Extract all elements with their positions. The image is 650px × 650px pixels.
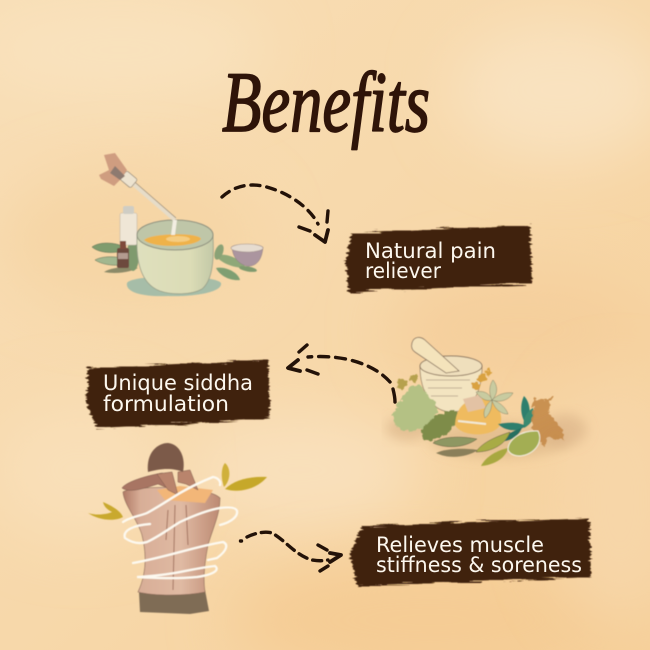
small dark bottle <box>117 241 129 268</box>
saucer <box>127 276 221 296</box>
yellow sprigs <box>397 374 418 389</box>
white ribbons <box>123 477 237 578</box>
label: natural pain reliever <box>346 225 532 292</box>
right leaves <box>222 463 267 491</box>
drop <box>171 220 177 235</box>
dropper cap <box>120 171 138 188</box>
cup rim and interior <box>137 220 213 250</box>
label: natural pain reliever: reliever <box>365 259 441 283</box>
teal leaf cluster <box>497 396 534 442</box>
pestle <box>412 337 459 373</box>
label: unique siddha formulation: Unique siddha <box>103 371 253 395</box>
spine <box>166 505 188 590</box>
right leaves <box>213 243 257 280</box>
hand <box>99 153 127 186</box>
orange sprigs top <box>472 369 491 390</box>
ground shadow <box>386 414 587 458</box>
dark green herb <box>421 411 458 441</box>
pale star herb <box>476 380 513 418</box>
yellow oil jar <box>455 398 501 434</box>
trousers <box>139 590 209 614</box>
title: Benefits <box>222 54 430 150</box>
mortar <box>420 366 482 412</box>
warm neck highlight <box>157 486 213 503</box>
label: unique siddha formulation: formulation <box>103 392 229 416</box>
label: relieves muscle stiffness and soreness <box>350 518 591 586</box>
left leaves <box>92 239 139 273</box>
cup body <box>137 236 213 294</box>
left leaf <box>88 502 123 520</box>
arrow: back to relieves muscle stiffness and soreness <box>240 532 341 571</box>
bare back <box>123 487 220 595</box>
arm across shoulders <box>122 473 172 490</box>
small bowl <box>231 244 263 266</box>
label: relieves muscle stiffness and soreness: stiffness & soreness <box>376 553 582 577</box>
illustration: herbal oil cup with dropper <box>92 153 263 296</box>
label: unique siddha formulation <box>86 360 270 428</box>
bottom leaves <box>433 431 540 466</box>
illustration: mortar, pestle and herbs <box>386 337 587 466</box>
label: relieves muscle stiffness and soreness: Relieves muscle <box>376 533 544 557</box>
brown sprig <box>532 398 565 447</box>
arrow: cup to natural pain reliever <box>222 185 328 242</box>
illustration: man holding his back wrapped in ribbons <box>88 443 267 614</box>
left green herb <box>393 385 437 431</box>
head <box>148 443 184 472</box>
tall bottle <box>120 206 137 245</box>
oil surface <box>144 234 201 246</box>
label: natural pain reliever: Natural pain <box>365 239 496 263</box>
hands <box>157 470 198 495</box>
arrow: herbs to unique siddha formulation <box>288 345 395 402</box>
dropper glass <box>132 183 175 220</box>
